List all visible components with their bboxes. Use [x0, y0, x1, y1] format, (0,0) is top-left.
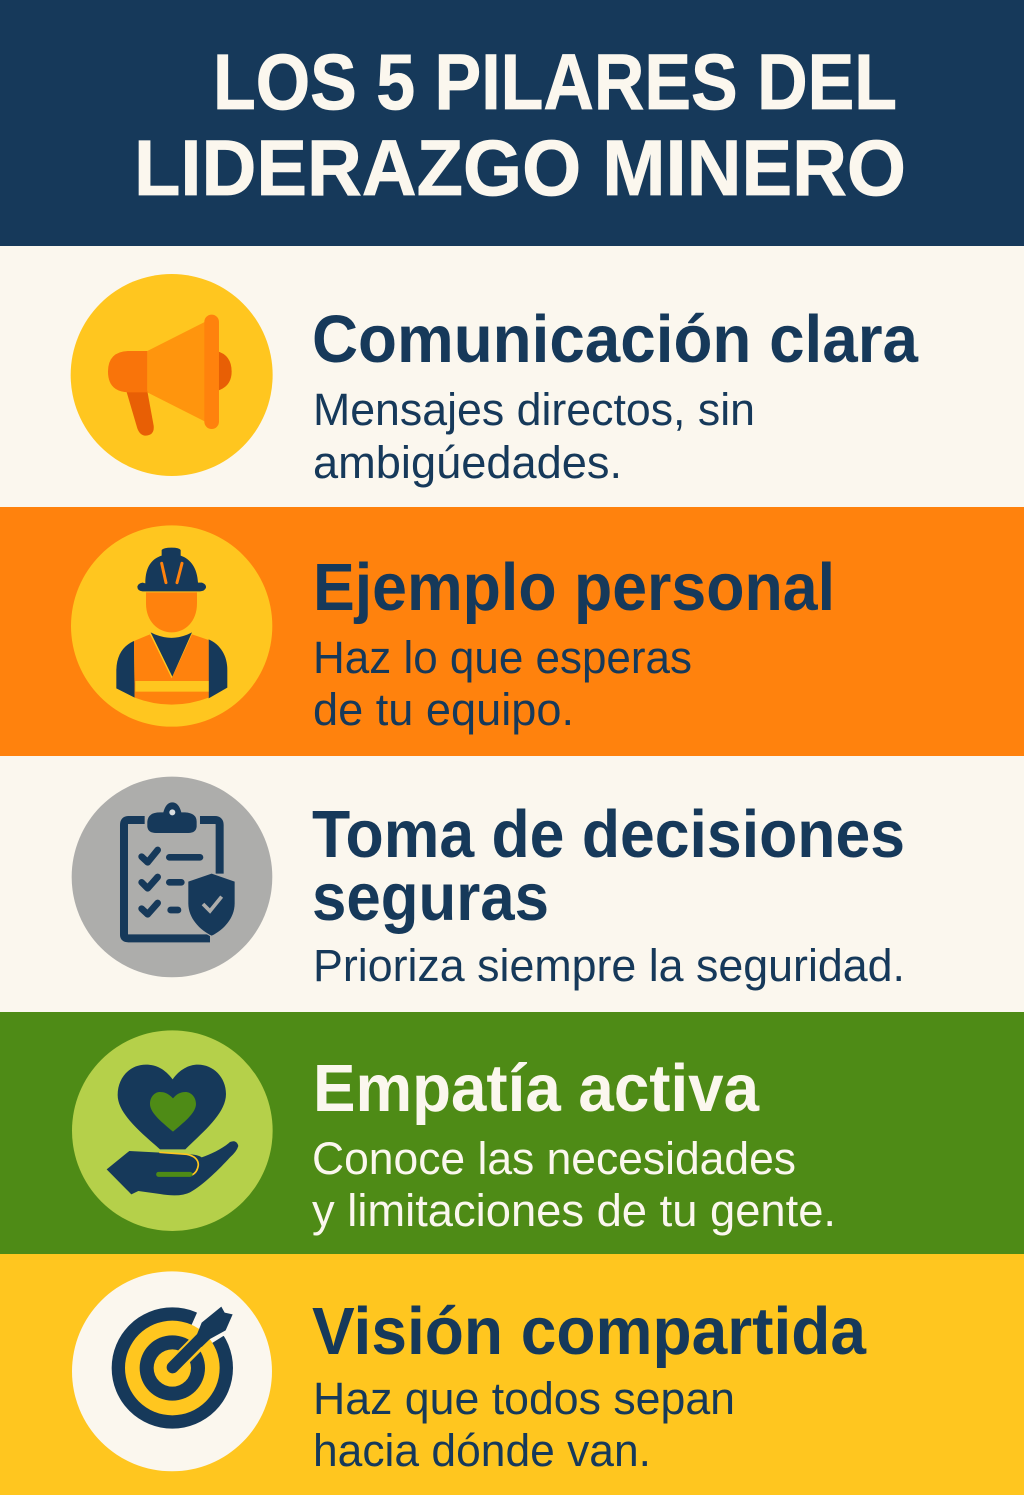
panel: empatía activa: [72, 1030, 836, 1236]
description: de tu equipo.: [313, 684, 574, 735]
panel: visión compartida: [72, 1271, 867, 1476]
title banner: [0, 0, 1024, 246]
title: LIDERAZGO MINERO: [134, 123, 906, 212]
description: [313, 632, 692, 735]
description: Haz que todos sepan: [313, 1373, 735, 1424]
description: [312, 1133, 836, 1236]
icon: megaphone: [71, 274, 273, 476]
heading: Toma de decisiones: [312, 797, 905, 872]
description: Mensajes directos, sin: [313, 384, 755, 435]
icon: hand holding heart: [72, 1030, 273, 1231]
icon: target with dart: [72, 1271, 272, 1471]
panel: comunicación clara: [71, 274, 919, 488]
description: ambigúedades.: [313, 437, 622, 488]
icon: clipboard and shield: [72, 777, 272, 977]
description: Haz lo que esperas: [313, 632, 692, 683]
title: [134, 37, 906, 212]
heading: Comunicación clara: [312, 302, 919, 377]
icon: miner worker: [71, 525, 272, 727]
heading: [312, 797, 905, 935]
heading: Visión compartida: [312, 1294, 867, 1369]
heading: Empatía activa: [313, 1051, 760, 1126]
heading: seguras: [312, 860, 549, 935]
description: Prioriza siempre la seguridad.: [313, 940, 905, 991]
description: y limitaciones de tu gente.: [312, 1185, 836, 1236]
panel: ejemplo personal: [71, 525, 835, 735]
description: hacia dónde van.: [313, 1425, 651, 1476]
title: LOS 5 PILARES DEL: [213, 37, 897, 126]
description: [313, 384, 755, 488]
panel: toma de decisiones seguras: [72, 777, 905, 991]
description: Conoce las necesidades: [312, 1133, 796, 1184]
heading: Ejemplo personal: [313, 550, 835, 625]
description: [313, 1373, 735, 1476]
